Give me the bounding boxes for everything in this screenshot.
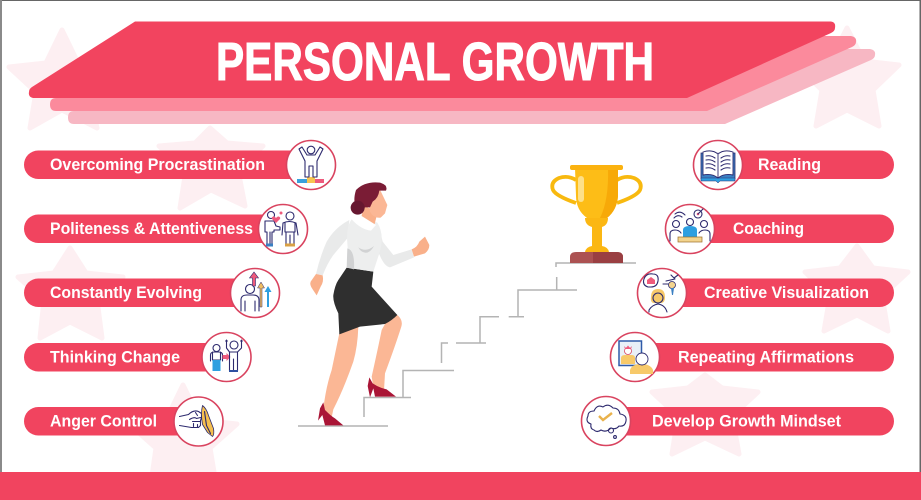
- pill: Overcoming Procrastination: [24, 140, 336, 190]
- neck and face: [361, 205, 377, 227]
- pill: Coaching: Coaching: [733, 220, 804, 238]
- pill: Thinking Change: [24, 332, 251, 382]
- stairs: [298, 263, 636, 426]
- front leg: [372, 315, 402, 391]
- pill: Reading: Reading: [758, 156, 821, 174]
- pill: Creative Visualization: [638, 268, 894, 318]
- icon: person on podium: [286, 140, 336, 190]
- pill: Develop Growth Mindset: Develop Growth Mindset: [652, 412, 841, 430]
- title: PERSONAL GROWTH: [216, 33, 654, 92]
- pill: Constantly Evolving: [24, 268, 280, 318]
- icon: woman imagining: [638, 268, 686, 318]
- bottom bar: [0, 472, 921, 500]
- trophy: [552, 165, 641, 263]
- pill: Coaching: [666, 204, 894, 254]
- icon: person transforming: [202, 332, 251, 382]
- left hand: [310, 274, 323, 295]
- icon: coaching group: [666, 204, 714, 254]
- front shoe: [368, 377, 396, 397]
- hair: [354, 182, 387, 209]
- right hand: [412, 237, 429, 257]
- pill: Politeness & Attentiveness: Politeness & Attentiveness: [50, 220, 253, 238]
- pill: Thinking Change: Thinking Change: [50, 348, 180, 366]
- blouse: [347, 217, 382, 272]
- icon: two people and heart: [258, 204, 308, 254]
- icon: open book: [694, 140, 742, 190]
- skirt: [333, 268, 397, 334]
- pill: Politeness & Attentiveness: [24, 204, 308, 254]
- pill: Anger Control: [24, 397, 223, 446]
- pill: Constantly Evolving: Constantly Evolving: [50, 284, 202, 302]
- back arm: [316, 220, 349, 275]
- collar: [352, 215, 376, 231]
- title banner: [29, 22, 875, 124]
- icon: person at mirror: [610, 332, 660, 382]
- pill: Repeating Affirmations: Repeating Affirmations: [678, 348, 854, 366]
- pill: Creative Visualization: Creative Visualization: [704, 284, 869, 302]
- pill: Develop Growth Mindset: [582, 396, 894, 446]
- icon: person with rising arrows: [230, 268, 280, 318]
- back leg: [323, 327, 358, 417]
- woman climbing stairs: [310, 182, 429, 425]
- front arm: [377, 223, 414, 267]
- icon: thought cloud with check: [582, 396, 630, 446]
- pill: Overcoming Procrastination: Overcoming Procrastination: [50, 156, 265, 174]
- back shoe: [318, 402, 343, 425]
- icon: fist and hand: [174, 397, 223, 446]
- pill: Repeating Affirmations: [610, 332, 894, 382]
- pill: Reading: [694, 140, 894, 190]
- pill: Anger Control: Anger Control: [50, 412, 157, 430]
